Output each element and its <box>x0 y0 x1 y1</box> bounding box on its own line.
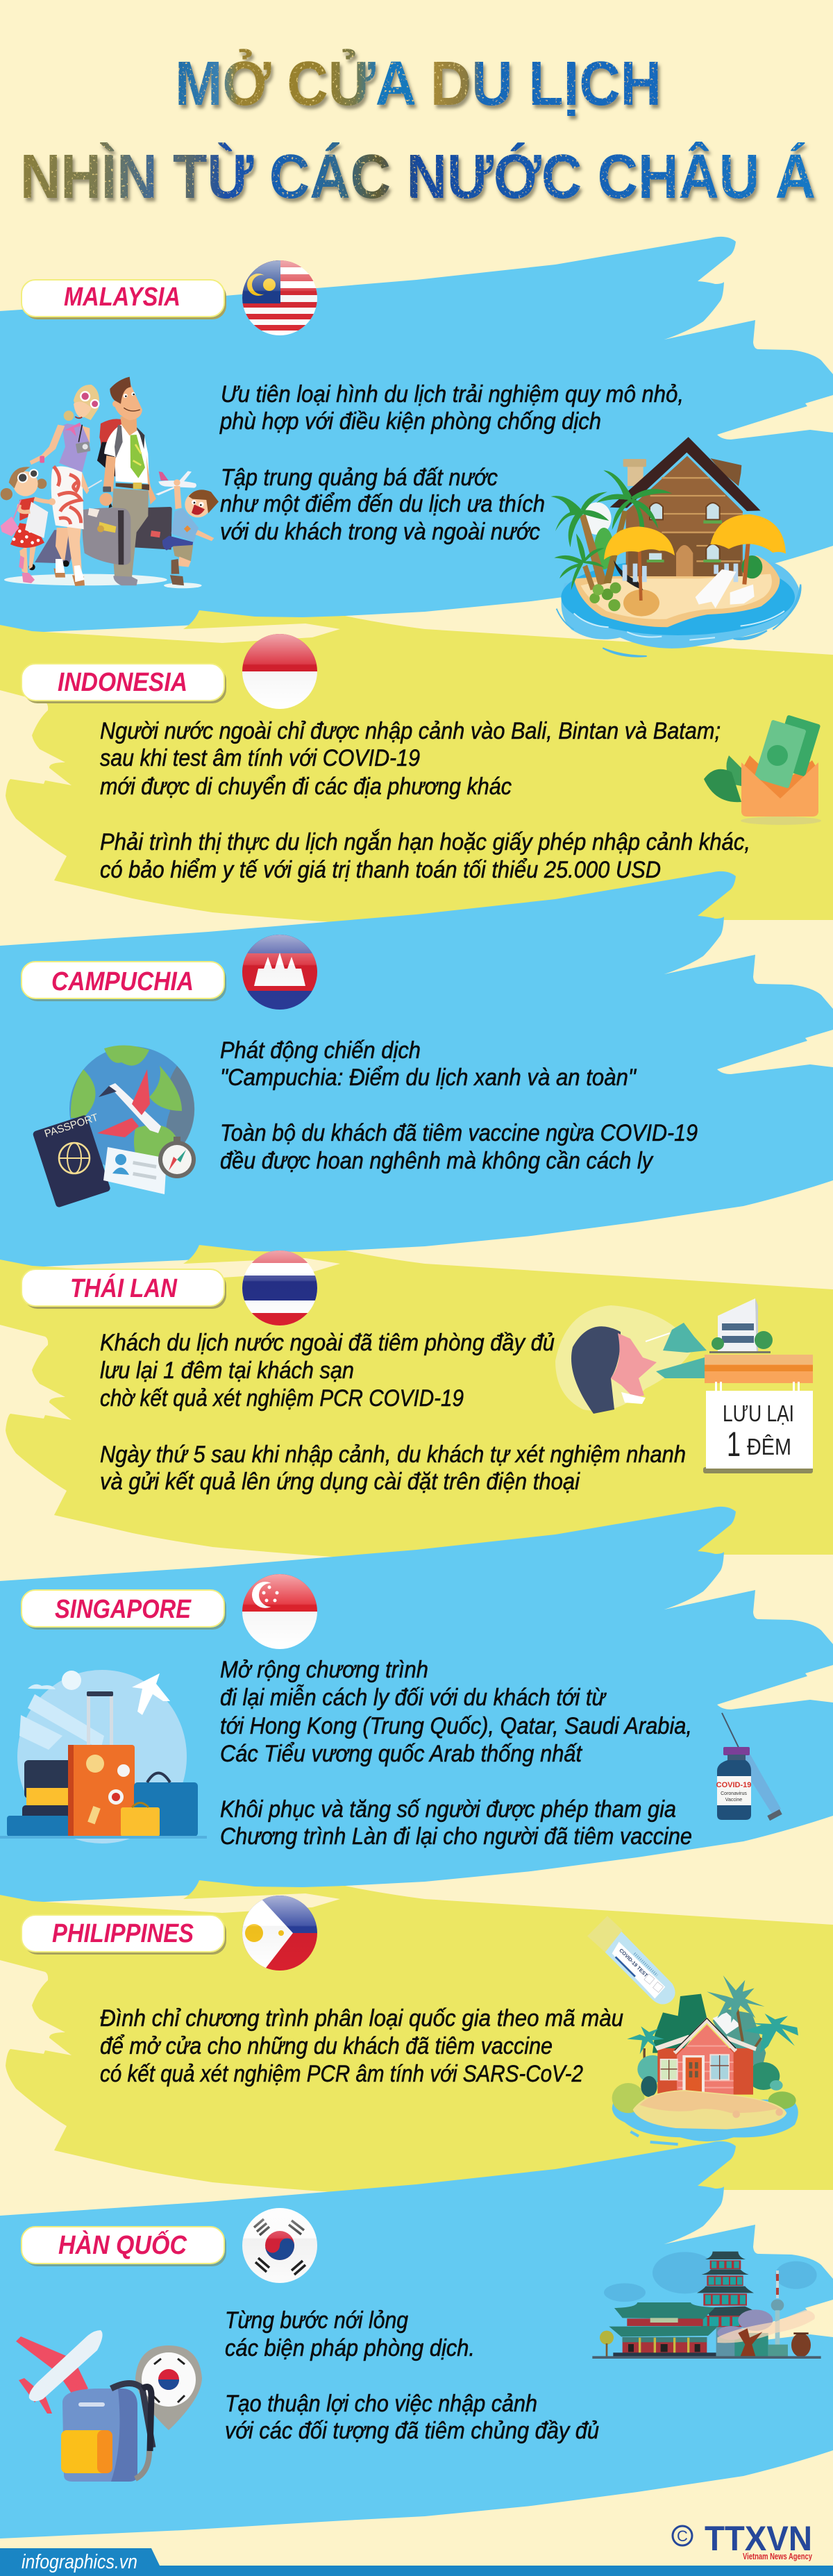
flag: Malaysia <box>242 260 317 335</box>
country tag: Han Quoc: HÀN QUỐC <box>58 2229 187 2260</box>
country tag: Singapore <box>22 1590 226 1630</box>
text: Singapore: đi lại miễn cách ly đối với du khách tới từ <box>220 1684 607 1711</box>
calendar: one night stay: LƯU LẠI <box>723 1400 794 1426</box>
text: Han Quoc: các biện pháp phòng dịch. <box>225 2335 475 2361</box>
title <box>20 48 816 212</box>
country tag: Indonesia: INDONESIA <box>58 668 187 697</box>
flag: Singapore <box>242 1574 317 1649</box>
text: Campuchia: đều được hoan nghênh mà không cần cách ly <box>220 1148 654 1174</box>
calendar: one night stay: 1 <box>727 1425 741 1464</box>
brush: Singapore blue <box>0 1507 833 1904</box>
text: Singapore: Các Tiểu vương quốc Arab thống nhất <box>220 1741 582 1767</box>
text: Indonesia: sau khi test âm tính với COVID-19 <box>100 745 420 771</box>
illustration: test tube <box>587 1916 675 2005</box>
flag: Campuchia <box>242 935 317 1010</box>
icon: hotel building <box>709 1298 773 1353</box>
panel: Indonesia <box>22 634 821 883</box>
icon: money envelope <box>704 714 821 825</box>
panel: Malaysia <box>1 260 801 657</box>
text: Philippines <box>100 2005 623 2087</box>
panel: Philippines <box>22 1896 798 2144</box>
flag: Indonesia <box>242 634 317 709</box>
text: Philippines: để mở cửa cho những du khách đã tiêm vaccine <box>100 2033 553 2059</box>
country tag: Philippines: PHILIPPINES <box>52 1919 194 1948</box>
illustration: island house <box>550 437 801 657</box>
flag: Philippines <box>242 1896 317 1971</box>
logo: TTXVN: TTXVN <box>705 2519 812 2558</box>
text: Han Quoc <box>225 2307 599 2444</box>
text: Malaysia: Ưu tiên loại hình du lịch trải nghiệm quy mô nhỏ, <box>221 381 684 408</box>
brush: Campuchia blue <box>0 871 833 1269</box>
text: Malaysia: với du khách trong và ngoài nước <box>220 519 540 545</box>
country tag: Singapore: SINGAPORE <box>55 1595 192 1624</box>
icon: vaccine and syringe: Coronavirus <box>721 1791 747 1796</box>
text: Han Quoc: Từng bước nới lỏng <box>225 2307 408 2334</box>
illustration: globe and passport: PASSPORT <box>43 1112 100 1140</box>
footer bar: infographics.vn <box>22 2551 137 2573</box>
text: Singapore: Mở rộng chương trình <box>220 1657 428 1683</box>
text: Philippines: Đình chỉ chương trình phân loại quốc gia theo mã màu <box>100 2005 623 2032</box>
text: Campuchia: Toàn bộ du khách đã tiêm vaccine ngừa COVID-19 <box>220 1120 698 1146</box>
text: Malaysia: phù hợp với điều kiện phòng chống dịch <box>219 408 601 435</box>
brush: Thai Lan yellow <box>0 1245 833 1566</box>
text: Indonesia: Phải trình thị thực du lịch ngắn hạn hoặc giấy phép nhập cảnh khác, <box>100 829 750 855</box>
footer bar <box>0 2548 833 2576</box>
country tag: Philippines <box>22 1915 226 1955</box>
logo: TTXVN <box>673 2519 813 2561</box>
country tag: Campuchia: CAMPUCHIA <box>51 967 194 996</box>
text: Thai Lan: Ngày thứ 5 sau khi nhập cảnh, du khách tự xét nghiệm nhanh <box>100 1441 686 1468</box>
calendar: one night stay: ĐÊM <box>747 1434 791 1460</box>
illustration: test tube: COVID-19 TEST <box>618 1947 650 1979</box>
panel: Han Quoc <box>16 2208 821 2482</box>
brush: Indonesia yellow <box>0 610 833 931</box>
illustration: island house Philippines <box>612 1975 798 2144</box>
text: Thai Lan: Khách du lịch nước ngoài đã tiêm phòng đầy đủ <box>100 1330 555 1356</box>
country tag: Thai Lan <box>22 1269 226 1309</box>
country tag: Han Quoc <box>22 2227 226 2266</box>
icon: vaccine and syringe: COVID-19 <box>716 1781 751 1789</box>
country tag: Malaysia <box>22 280 226 319</box>
text: Malaysia <box>219 381 684 545</box>
text: Indonesia: Người nước ngoài chỉ được nhập cảnh vào Bali, Bintan và Batam; <box>100 718 721 744</box>
panel: Campuchia <box>22 935 698 1208</box>
text: Singapore <box>220 1657 692 1850</box>
brush: Philippines yellow <box>0 1880 833 2201</box>
country tag: Campuchia <box>22 962 226 1001</box>
country tag: Malaysia: MALAYSIA <box>64 283 180 312</box>
text: Philippines: có kết quả xét nghiệm PCR âm tính với SARS-CoV-2 <box>100 2061 583 2087</box>
illustration: family of travellers <box>1 377 219 588</box>
illustration: swab test <box>555 1305 707 1414</box>
brush: Malaysia blue <box>0 237 833 634</box>
illustration: luggage <box>0 1670 207 1843</box>
calendar: one night stay <box>703 1355 813 1473</box>
icon: vaccine and syringe <box>716 1713 782 1821</box>
text: Thai Lan: lưu lại 1 đêm tại khách sạn <box>100 1357 354 1384</box>
text: Campuchia: Phát động chiến dịch <box>220 1037 421 1064</box>
country tag: Indonesia <box>22 664 226 703</box>
panel: Singapore <box>0 1574 782 1850</box>
title: MỞ CỬA DU LỊCH <box>175 48 662 119</box>
illustration: Korean palace <box>592 2252 821 2359</box>
text: Malaysia: Tập trung quảng bá đất nước <box>221 465 498 491</box>
country tag: Thai Lan: THÁI LAN <box>70 1273 178 1303</box>
text: Thai Lan: chờ kết quả xét nghiệm PCR COVID-19 <box>100 1385 464 1412</box>
text: Thai Lan: và gửi kết quả lên ứng dụng cài đặt trên điện thoại <box>100 1469 580 1495</box>
text: Singapore: Khôi phục và tăng số người được phép tham gia <box>220 1796 676 1823</box>
text: Indonesia: mới được di chuyển đi các địa phương khác <box>100 773 512 800</box>
text: Singapore: tới Hong Kong (Trung Quốc), Qatar, Saudi Arabia, <box>220 1713 692 1739</box>
text: Malaysia: như một điểm đến du lịch ưa thích <box>220 491 545 517</box>
text: Singapore: Chương trình Làn đi lại cho người đã tiêm vaccine <box>220 1823 692 1850</box>
flag: South Korea <box>242 2208 317 2283</box>
text: Thai Lan <box>100 1330 686 1495</box>
text: Han Quoc: với các đối tượng đã tiêm chủng đầy đủ <box>225 2418 599 2444</box>
text: Han Quoc: Tạo thuận lợi cho việc nhập cảnh <box>225 2391 537 2417</box>
text: Indonesia <box>100 718 750 883</box>
illustration: globe and passport <box>32 1045 196 1208</box>
logo: TTXVN: C <box>677 2527 688 2545</box>
flag: Thai Lan <box>242 1251 317 1325</box>
brush: Han Quoc blue <box>0 2141 833 2539</box>
text: Indonesia: có bảo hiểm y tế với giá trị thanh toán tối thiểu 25.000 USD <box>100 857 661 883</box>
illustration: plane and backpack <box>16 2330 202 2482</box>
text: Campuchia: "Campuchia: Điểm du lịch xanh và an toàn" <box>220 1064 637 1091</box>
panel: Thai Lan <box>22 1251 813 1495</box>
text: Campuchia <box>220 1037 698 1174</box>
icon: vaccine and syringe: Vaccine <box>725 1798 742 1803</box>
